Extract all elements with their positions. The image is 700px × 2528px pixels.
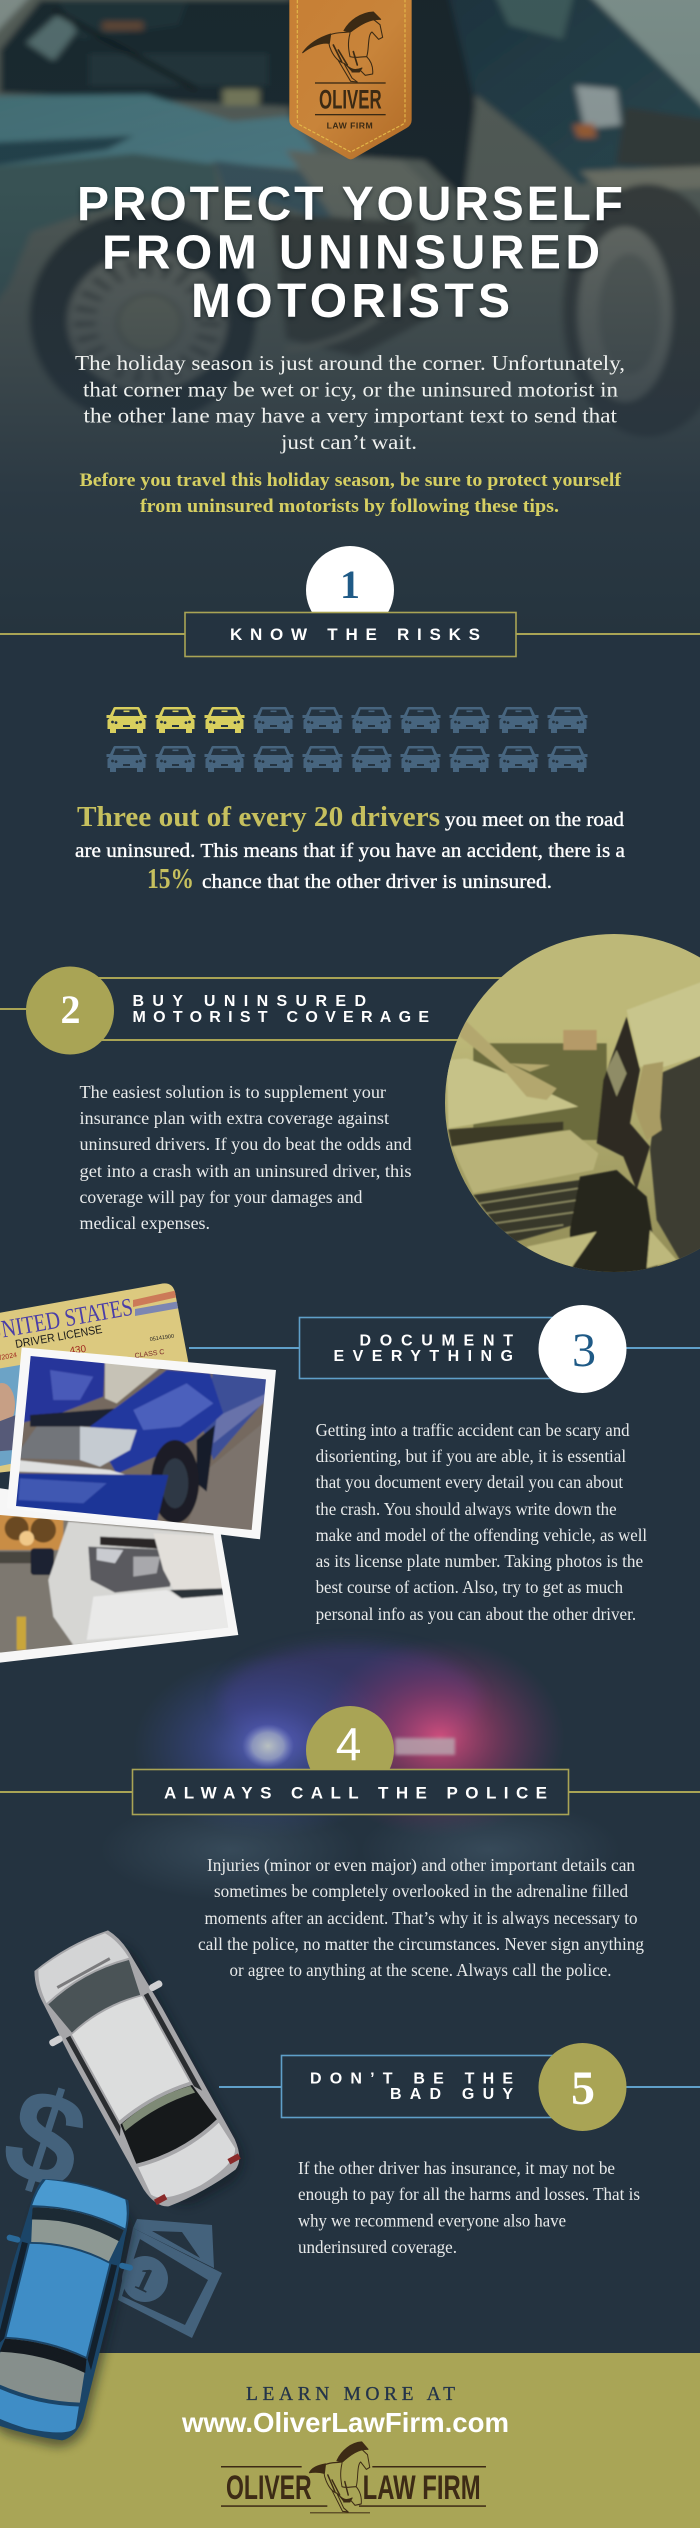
section 4 body text: or agree to anything at the scene. Always call the police. xyxy=(230,1960,612,1980)
icon: dollar bills: 1 xyxy=(129,2260,160,2301)
section 3 body text: Getting into a traffic accident can be scary and xyxy=(316,1420,630,1440)
statistic text: are uninsured. This means that if you have an accident, there is a xyxy=(75,840,625,862)
footer logo: LAW FIRM xyxy=(363,2469,481,2507)
section 2 header: buy coverage xyxy=(0,966,510,1054)
section 3 body text: disorienting, but if you are able, it is essential xyxy=(316,1446,626,1466)
footer logo xyxy=(221,2442,486,2513)
driver license card: 05141900 xyxy=(149,1334,175,1343)
section 4 header: always call the police xyxy=(0,1706,700,1814)
section 2 body text: insurance plan with extra coverage against xyxy=(80,1108,389,1128)
logo text: Oliver Law Firm: OLIVER xyxy=(319,85,382,115)
police lights glow xyxy=(100,1638,620,1900)
icon: dollar bills xyxy=(118,2219,222,2338)
section 4 heading box: ALWAYS CALL THE POLICE xyxy=(164,1784,547,1802)
intro paragraph: the other lane may have a very important text to send that xyxy=(84,404,617,428)
title: PROTECT YOURSELF xyxy=(77,178,623,231)
section 1 heading box xyxy=(185,612,516,656)
section 4 body text: sometimes be completely overlooked in the adrenaline filled xyxy=(214,1881,628,1901)
connector line: document everything xyxy=(189,1347,700,1349)
section 2 body text: get into a crash with an uninsured driver, this xyxy=(80,1161,412,1181)
intro highlighted text xyxy=(80,471,622,517)
section 3 body text: personal info as you can about the other driver. xyxy=(316,1604,636,1624)
section 3 body text xyxy=(316,1420,647,1624)
section 2 heading xyxy=(132,993,429,1026)
blue car crash photo xyxy=(7,1347,276,1539)
number 2 badge: 2 xyxy=(60,987,80,1032)
statistic text xyxy=(75,801,625,895)
section 3 body text: the crash. You should always write down the xyxy=(316,1499,617,1519)
section 5 body text xyxy=(298,2158,640,2257)
number 4 badge xyxy=(306,1706,394,1794)
number 3 badge xyxy=(538,1305,626,1393)
section 3 body text: as its license plate number. Taking photos is the xyxy=(316,1551,643,1571)
white car crash photo xyxy=(0,1488,238,1663)
title: MOTORISTS xyxy=(191,275,510,328)
intro paragraph: The holiday season is just around the corner. Unfortunately, xyxy=(75,351,625,375)
section 5 header: don't be the bad guy xyxy=(282,2043,626,2131)
statistic text: Three out of every 20 drivers xyxy=(77,801,440,833)
number 5 badge: 5 xyxy=(571,2062,595,2115)
section 2 heading: BUY UNINSURED xyxy=(132,993,366,1010)
section 4 body text: moments after an accident. That’s why it is always necessary to xyxy=(204,1908,638,1928)
connector line: bad guy xyxy=(219,2086,700,2088)
section 3 heading box: EVERYTHING xyxy=(334,1348,513,1365)
intro paragraph xyxy=(75,351,625,454)
statistic text: you meet on the road xyxy=(445,809,624,831)
logo text: Oliver Law Firm: LAW FIRM xyxy=(327,120,373,130)
photo collage: license and crash photos xyxy=(0,1270,276,1663)
number 1 badge xyxy=(306,546,394,634)
number 3 badge: 3 xyxy=(572,1324,596,1377)
driver license card: CLASS C xyxy=(134,1349,165,1360)
section 3 header: document everything xyxy=(300,1305,626,1393)
number 2 badge xyxy=(26,966,114,1054)
section 5 body text: underinsured coverage. xyxy=(298,2237,457,2257)
footer call to action: LEARN MORE AT xyxy=(246,2384,455,2405)
pictogram: 3 of 20 cars highlighted xyxy=(106,707,588,772)
section 5 heading box: DON’T BE THE xyxy=(310,2070,513,2088)
section 5 body text: enough to pay for all the harms and losses. That is xyxy=(298,2184,640,2204)
driver license card xyxy=(0,1283,188,1472)
footer logo: OLIVER xyxy=(226,2469,312,2507)
section 2 body text: medical expenses. xyxy=(80,1213,210,1233)
driver license card: 430 xyxy=(69,1344,87,1357)
footer panel xyxy=(0,2353,700,2528)
section 1 header: know the risks xyxy=(0,546,700,656)
number 4 badge: 4 xyxy=(336,1718,361,1770)
logo badge: leather tag xyxy=(289,0,412,159)
section 5 body text: If the other driver has insurance, it may not be xyxy=(298,2158,615,2178)
intro highlighted text: from uninsured motorists by following these tips. xyxy=(140,497,559,517)
intro highlighted text: Before you travel this holiday season, be sure to protect yourself xyxy=(80,471,622,491)
section 4 body text: Injuries (minor or even major) and other important details can xyxy=(207,1855,635,1876)
intro paragraph: that corner may be wet or icy, or the uninsured motorist in xyxy=(83,378,619,402)
driver license card: DRIVER LICENSE xyxy=(14,1324,103,1351)
section 4 heading box xyxy=(132,1770,568,1814)
section 5 body text: why we recommend everyone also have xyxy=(298,2210,566,2230)
section 2 heading: MOTORIST COVERAGE xyxy=(132,1009,429,1026)
section 2 body text: coverage will pay for your damages and xyxy=(80,1187,362,1207)
section 2 body text: The easiest solution is to supplement your xyxy=(80,1082,386,1102)
illustration: silver car, top view xyxy=(13,1916,263,2228)
section 1 heading box: KNOW THE RISKS xyxy=(230,625,480,644)
number 5 badge xyxy=(538,2043,626,2131)
section 3 body text: make and model of the offending vehicle, as well xyxy=(316,1525,647,1545)
footer call to action: www.OliverLawFirm.com xyxy=(181,2407,509,2438)
section 2 body text xyxy=(80,1082,412,1233)
photo circle: drivers at a crash, duotone xyxy=(430,930,700,1283)
statistic text: 15% xyxy=(147,863,194,895)
logo text: Oliver Law Firm xyxy=(315,82,386,130)
section 4 body text xyxy=(198,1855,644,1980)
title: FROM UNINSURED xyxy=(102,226,600,280)
icon: footer horse xyxy=(309,2442,370,2512)
icon: running horse xyxy=(303,12,383,82)
illustration: blue car, top view xyxy=(0,2169,150,2455)
section 3 heading box xyxy=(300,1318,560,1378)
hero photo: crashed cars xyxy=(0,0,700,486)
section 4 body text: call the police, no matter the circumstances. Never sign anything xyxy=(198,1934,644,1954)
section 5 heading box: BAD GUY xyxy=(390,2086,513,2103)
title xyxy=(77,178,623,328)
intro paragraph: just can’t wait. xyxy=(280,430,417,454)
section 2 body text: uninsured drivers. If you do beat the odds and xyxy=(80,1134,412,1154)
section 5 heading box xyxy=(282,2056,560,2118)
statistic text: chance that the other driver is uninsured. xyxy=(202,871,552,893)
section 3 body text: that you document every detail you can about xyxy=(316,1472,623,1492)
footer call to action xyxy=(181,2384,509,2438)
section 3 body text: best course of action. Also, try to get as much xyxy=(316,1577,623,1597)
number 1 badge: 1 xyxy=(340,562,360,607)
section 3 heading box: DOCUMENT xyxy=(360,1332,513,1350)
